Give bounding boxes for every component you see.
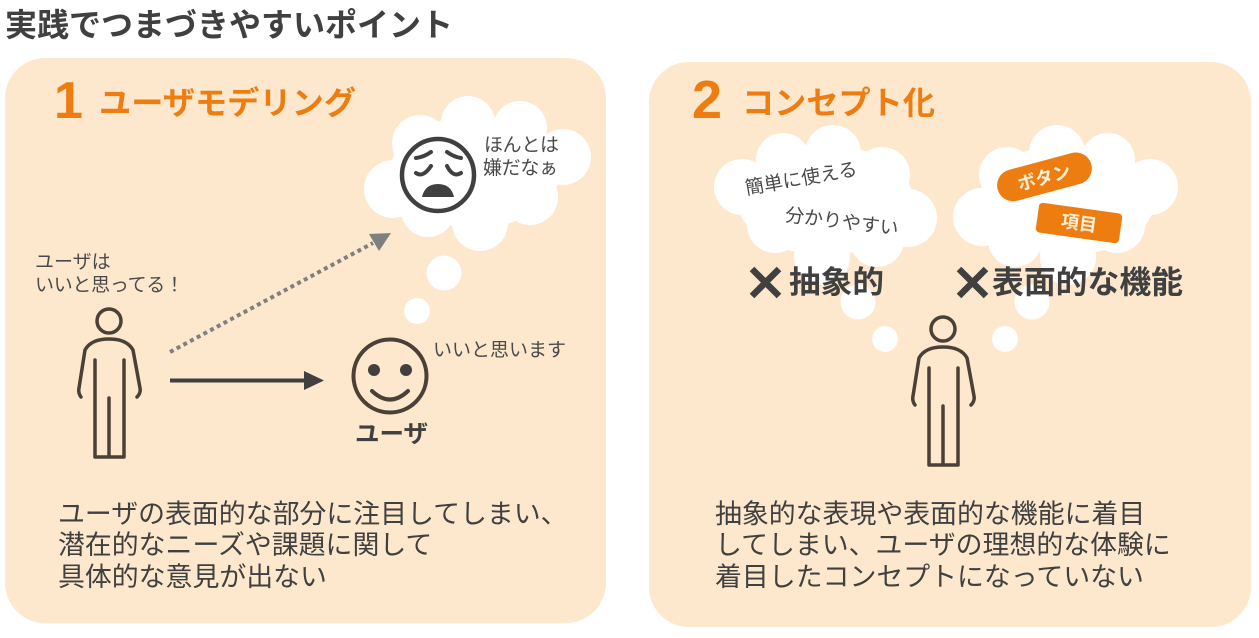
thought cloud: surface features [953, 125, 1178, 352]
thought text: 嫌だなぁ [483, 157, 558, 179]
thought text: ほんとは [484, 135, 559, 156]
icon: smiling face [354, 340, 426, 412]
heading: concept: コンセプト化 [742, 85, 935, 121]
icon: person [913, 317, 974, 465]
title: 実践でつまづきやすいポイント [5, 7, 453, 43]
arrow: dotted to true feeling [170, 233, 391, 352]
cross mark and label: surface features: 表面的な機能 [992, 264, 1183, 300]
item chip [1035, 202, 1123, 244]
button chip [993, 149, 1095, 205]
icon: designer person [79, 309, 140, 457]
thought text: easy to understand: 分かりやすい [784, 204, 900, 240]
thought cloud: real feeling [364, 96, 591, 324]
heading number 1: 1 [54, 72, 83, 130]
body text: ユーザの表面的な部分に注目してしまい、 [58, 499, 568, 529]
user remark: いいと思います [433, 340, 566, 361]
designer remark: いいと思ってる！ [35, 275, 184, 296]
thought cloud: abstract [714, 125, 937, 352]
body text: 着目したコンセプトになっていない [715, 562, 1144, 592]
item chip: 項目 [1060, 211, 1098, 236]
body text: 潜在的なニーズや課題に関して [58, 530, 432, 560]
button chip: ボタン [1016, 161, 1073, 195]
body text: 具体的な意見が出ない [58, 562, 327, 592]
arrow: solid to user [170, 371, 324, 390]
body text: してしまい、ユーザの理想的な体験に [715, 530, 1171, 560]
panel: user modeling [5, 58, 606, 623]
cross mark and label: abstract: 抽象的 [789, 265, 884, 300]
designer remark: ユーザは [35, 252, 111, 273]
icon: sad face [402, 139, 474, 211]
heading: user modeling: ユーザモデリング [99, 85, 356, 121]
panel: concept [649, 62, 1251, 627]
label: user: ユーザ [355, 421, 428, 448]
body text: 抽象的な表現や表面的な機能に着目 [715, 499, 1145, 529]
thought text: easy to use: 簡単に使える [743, 158, 859, 200]
heading number 2: 2 [692, 70, 722, 130]
